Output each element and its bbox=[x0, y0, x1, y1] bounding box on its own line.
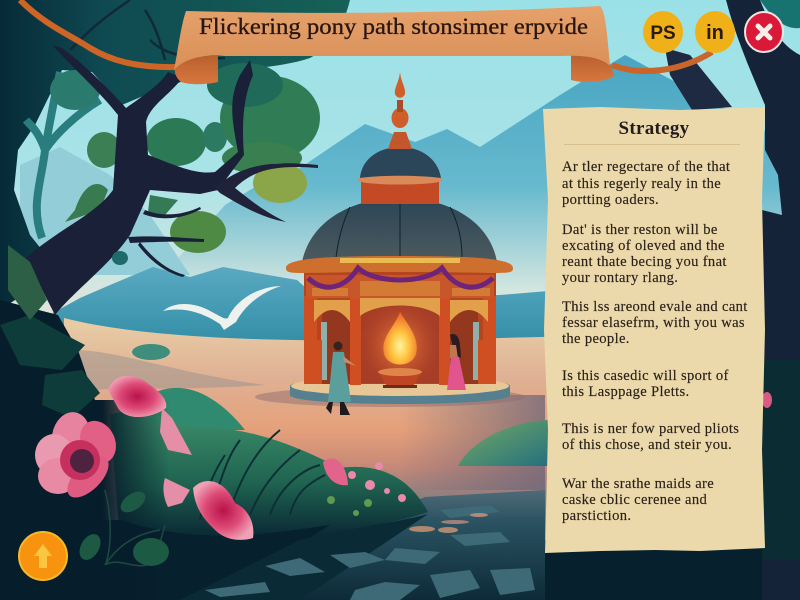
ground bbox=[64, 318, 800, 540]
eave gold bbox=[340, 258, 460, 263]
distant mound bbox=[132, 344, 170, 360]
fern bbox=[8, 245, 47, 320]
foliage cluster c bbox=[203, 122, 227, 152]
head and hair bbox=[334, 342, 342, 350]
paragraph 3: the people. bbox=[562, 331, 630, 347]
grass mound bbox=[110, 411, 428, 540]
garland bbox=[308, 268, 493, 287]
tiny flowers bbox=[348, 462, 406, 502]
paragraph 3: This lss areond evale and cant bbox=[562, 299, 748, 315]
centre bbox=[70, 449, 94, 473]
trunk bbox=[726, 0, 800, 600]
left side opening bbox=[322, 310, 350, 384]
petal bottom right bbox=[60, 449, 116, 505]
body bbox=[304, 272, 496, 384]
eave bbox=[286, 256, 513, 273]
paragraph 1: Ar tler regectare of the that bbox=[562, 159, 730, 175]
paragraph 1: at this regerly realy in the bbox=[562, 176, 721, 192]
foliage teal bbox=[50, 70, 100, 110]
right dark strip bbox=[180, 514, 428, 600]
stems bbox=[105, 490, 165, 566]
lattice gold bbox=[312, 281, 490, 296]
foliage lower bbox=[222, 142, 302, 174]
paragraph 6: caske cblic cerenee and bbox=[562, 492, 708, 508]
fire bowl bbox=[379, 372, 421, 385]
pale gap left bbox=[321, 322, 327, 380]
paragraph 2: excating of oleved and the bbox=[562, 238, 725, 254]
paragraph 1: portting oaders. bbox=[562, 192, 659, 208]
bowl rim bbox=[378, 368, 422, 376]
foliage cluster e bbox=[148, 195, 178, 215]
petal bottom left bbox=[38, 458, 78, 494]
parchment bbox=[543, 107, 765, 553]
side bud bbox=[160, 408, 192, 455]
path stones warm 3 bbox=[441, 520, 469, 524]
platform shadow bbox=[255, 387, 525, 407]
leaf left bbox=[75, 530, 105, 564]
lower dome bbox=[302, 198, 497, 262]
dress bbox=[447, 357, 466, 390]
green mound left bbox=[150, 388, 245, 430]
right roll bbox=[571, 55, 614, 82]
right side opening bbox=[450, 310, 478, 384]
top twigs bbox=[70, 0, 225, 60]
torso bbox=[450, 345, 458, 358]
button in bbox=[695, 11, 735, 53]
foliage cluster d bbox=[65, 184, 108, 222]
upper flower bbox=[108, 376, 166, 417]
dress bbox=[328, 352, 351, 402]
right branch bbox=[215, 163, 318, 222]
right tree bbox=[665, 0, 800, 600]
paragraph 2: reant thate becing you fnat bbox=[562, 254, 727, 270]
flower right bbox=[762, 392, 772, 408]
path stones warm 4 bbox=[470, 513, 488, 517]
pale gap right bbox=[473, 322, 479, 380]
lower dome ribs bbox=[336, 200, 462, 258]
foliage cluster a bbox=[87, 132, 121, 168]
platform top bbox=[291, 376, 509, 396]
petal top bbox=[48, 409, 94, 465]
bowl base bbox=[383, 385, 417, 388]
lower flower bbox=[193, 481, 253, 540]
finial ball bbox=[392, 108, 408, 128]
left roll bbox=[175, 56, 218, 84]
columns bbox=[304, 275, 496, 385]
corner dark bbox=[0, 300, 100, 520]
badge bbox=[643, 11, 683, 53]
paragraph 3: fessar elasefrm, with you was bbox=[562, 315, 745, 331]
cobblestones bbox=[205, 505, 535, 600]
left darkness bbox=[0, 400, 170, 600]
canopy bbox=[0, 0, 350, 310]
path stones warm 2 bbox=[438, 527, 458, 533]
shaded path edge bbox=[72, 350, 265, 392]
paragraph 5: This is ner fow parved pliots bbox=[562, 421, 739, 437]
finial base bbox=[388, 132, 412, 149]
trunk bbox=[26, 45, 253, 315]
small leaves bbox=[327, 496, 372, 516]
badge bbox=[745, 12, 783, 52]
lower bud bbox=[163, 478, 190, 507]
paragraph 6: parstiction. bbox=[562, 508, 631, 524]
paragraph 2: Dat' is ther reston will be bbox=[562, 222, 718, 238]
arm bbox=[343, 356, 356, 366]
drum rim bbox=[358, 174, 442, 184]
flame bbox=[383, 312, 417, 364]
cobble base bbox=[180, 490, 545, 600]
twig a bbox=[128, 236, 204, 277]
pale left mountain bbox=[20, 147, 190, 275]
small leaves bbox=[112, 251, 128, 265]
green mound right bbox=[458, 420, 548, 466]
cross bbox=[758, 26, 770, 38]
small flower bbox=[323, 459, 348, 485]
far mountains bbox=[150, 55, 800, 320]
near mountains bbox=[40, 267, 800, 350]
finial neck bbox=[397, 100, 403, 112]
rope left bbox=[20, 0, 178, 67]
paragraph 2: your rontary rlang. bbox=[562, 270, 678, 286]
paragraph 6: War the srathe maids are bbox=[562, 476, 714, 492]
up arrow button bbox=[19, 532, 67, 580]
paragraph 5: of this chose, and steir you. bbox=[562, 437, 732, 453]
frieze bbox=[306, 275, 494, 298]
hair bbox=[450, 334, 461, 358]
dark leaves bbox=[0, 315, 100, 418]
interior bbox=[360, 305, 440, 383]
legs bbox=[326, 402, 350, 415]
banner body bbox=[174, 6, 610, 70]
rope right bbox=[612, 52, 712, 71]
woman in pink bbox=[447, 334, 466, 390]
label: in bbox=[706, 22, 724, 44]
background tree trunk bbox=[26, 72, 100, 238]
paragraph 4: this Lasppage Pletts. bbox=[562, 384, 690, 400]
button PS bbox=[643, 11, 683, 53]
badge bbox=[695, 11, 735, 53]
foliage canopy top bbox=[207, 63, 283, 107]
branch bbox=[665, 48, 732, 110]
path stones warm bbox=[409, 526, 435, 532]
button close bbox=[745, 12, 783, 52]
foliage yellow bbox=[253, 163, 307, 203]
petal right bbox=[73, 415, 123, 469]
leaf right bbox=[133, 538, 169, 566]
arches bbox=[314, 298, 488, 322]
title banner bbox=[174, 6, 614, 84]
bird bbox=[163, 286, 281, 330]
grass blades bbox=[200, 430, 325, 520]
left tree bbox=[0, 0, 350, 315]
paragraph 4: Is this casedic will sport of bbox=[562, 368, 729, 384]
petal left bbox=[35, 434, 73, 476]
twig b bbox=[143, 207, 201, 218]
arrow bbox=[34, 544, 52, 568]
pavilion bbox=[255, 72, 525, 415]
large flower bbox=[35, 409, 123, 505]
label: PS bbox=[650, 23, 676, 44]
foliage canopy right bbox=[220, 76, 320, 160]
platform bbox=[290, 378, 510, 404]
strategy panel bbox=[543, 107, 765, 553]
fire glow bbox=[358, 299, 442, 391]
panel heading: Strategy bbox=[618, 118, 690, 139]
badge bbox=[19, 532, 67, 580]
foliage cluster f bbox=[170, 211, 226, 253]
bottom dark bbox=[0, 520, 330, 600]
leaves bbox=[760, 0, 800, 28]
foliage cluster b bbox=[146, 118, 206, 166]
leaf mid bbox=[117, 487, 149, 517]
upper dome bbox=[360, 147, 441, 178]
lower right foliage bbox=[762, 360, 800, 560]
foreground dark bbox=[0, 245, 535, 600]
title text: Flickering pony path stonsimer erpvide bbox=[199, 14, 588, 39]
drum bbox=[361, 181, 439, 204]
flowers bbox=[35, 376, 406, 566]
woman in teal bbox=[326, 342, 356, 415]
heart bbox=[60, 440, 100, 480]
heading rule bbox=[564, 144, 740, 145]
finial top bbox=[395, 72, 405, 98]
ground shade right bbox=[400, 395, 545, 490]
sky bbox=[0, 0, 800, 345]
